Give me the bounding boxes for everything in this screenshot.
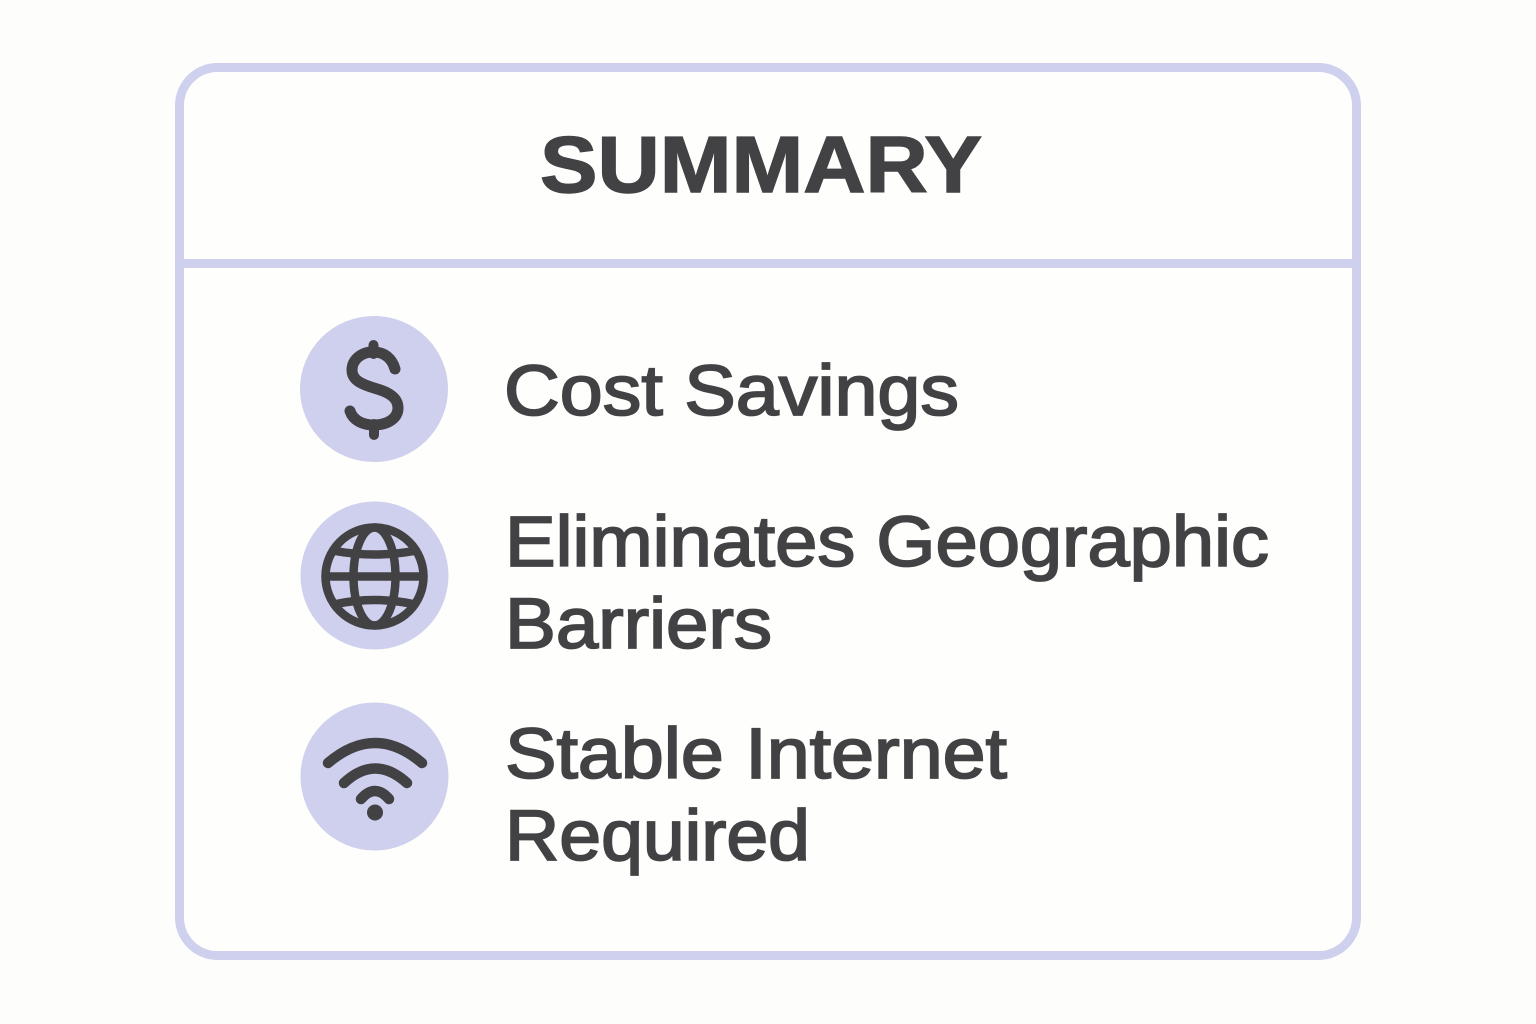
label: cost savings: Cost Savings xyxy=(504,352,959,431)
icon: globe xyxy=(300,502,448,650)
label: stable internet required: Required xyxy=(505,797,810,876)
item: stable internet required xyxy=(300,702,1027,876)
panel: summary card xyxy=(180,68,1356,956)
label: stable internet required: Stable Internet xyxy=(505,715,1007,794)
item: cost savings xyxy=(300,316,959,462)
label: eliminates geographic barriers: Barriers xyxy=(505,585,772,664)
item: eliminates geographic barriers xyxy=(300,502,1289,664)
icon: wifi xyxy=(300,702,448,850)
label: eliminates geographic barriers: Eliminates Geographic xyxy=(505,503,1269,582)
title: SUMMARY xyxy=(540,120,982,209)
icon: dollar sign xyxy=(300,316,448,462)
